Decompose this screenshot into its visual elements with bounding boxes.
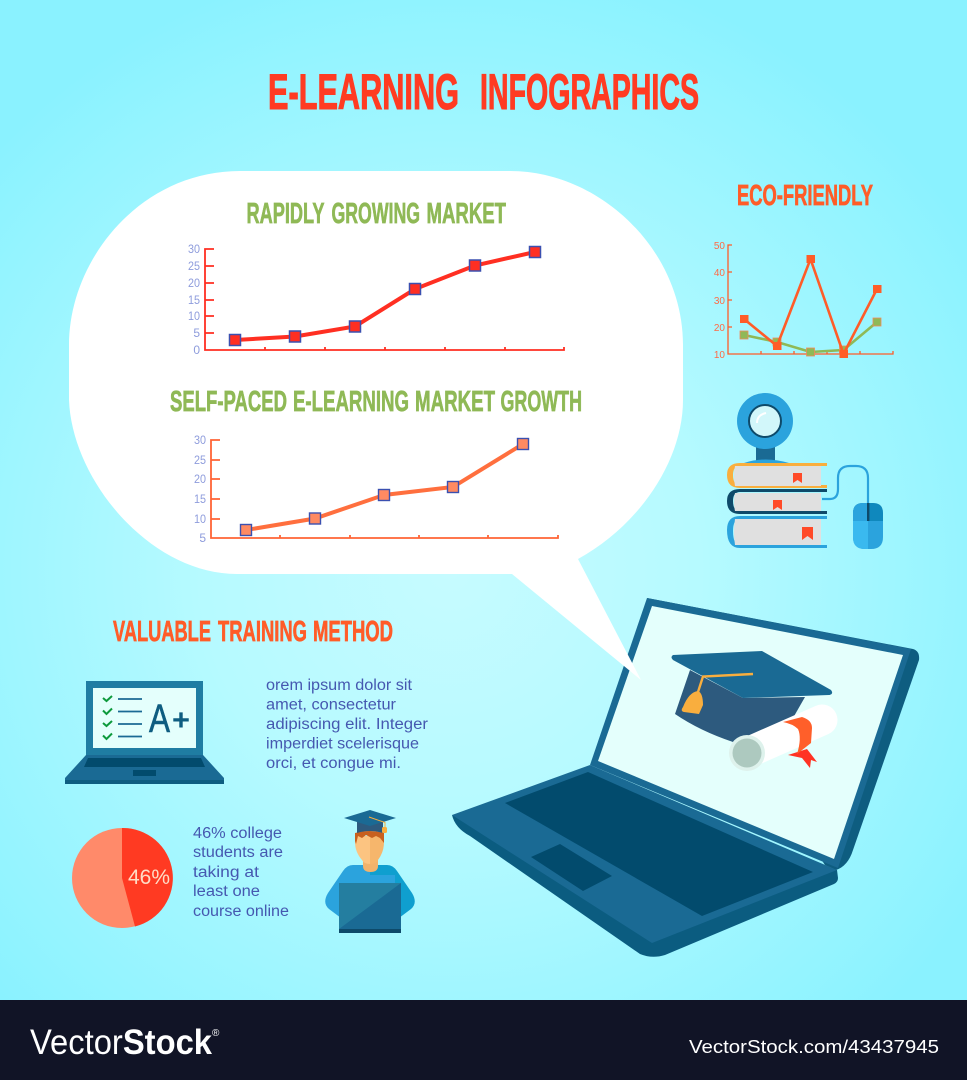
mouse lower body [853, 521, 883, 549]
y axis labels: 50 [714, 241, 725, 252]
webcam lens [749, 405, 781, 437]
heading: valuable training method: METHOD [313, 616, 393, 648]
lid front [590, 598, 911, 868]
y axis labels: 30 [714, 296, 725, 307]
axes [211, 440, 558, 538]
webcam [737, 393, 793, 463]
footer bar [0, 1000, 967, 1080]
bookmark [793, 473, 802, 483]
pages [734, 519, 821, 545]
text block: college students statistic [193, 825, 289, 920]
graduation cap [672, 651, 832, 742]
ribbon tails [788, 749, 817, 768]
text block: college students statistic: 46% college [193, 825, 282, 842]
text block: college students statistic: taking at [193, 864, 260, 881]
heading: self-paced e-learning market growth: E-LEARNING [293, 386, 409, 418]
pie chart: 46 percent [72, 828, 173, 928]
heading: self-paced e-learning market growth [170, 386, 582, 418]
heading: self-paced e-learning market growth: GROWTH [500, 386, 582, 418]
laptop screen [598, 606, 903, 859]
y axis labels: 40 [714, 268, 725, 279]
roll [747, 720, 822, 753]
laptop base top [452, 765, 837, 943]
touchpad [133, 770, 156, 776]
y axis labels: 30 [188, 242, 200, 256]
y axis labels: 10 [188, 309, 200, 323]
heading: eco-friendly: ECO-FRIENDLY [737, 180, 873, 212]
footer logo: VectorStock [30, 1023, 212, 1062]
neck [363, 858, 378, 872]
y axis labels: 25 [188, 259, 200, 273]
left arm and shoulder [325, 865, 370, 918]
y axis labels: 0 [193, 343, 200, 357]
y axis labels: 10 [714, 350, 725, 361]
orange series markers [740, 255, 882, 358]
roll end [729, 735, 765, 771]
heading: self-paced e-learning market growth: SELF-PACED [170, 386, 287, 418]
lens highlight [757, 413, 766, 423]
green series markers [740, 318, 881, 356]
laptop lid side [647, 598, 919, 870]
y axis labels: 20 [188, 276, 200, 290]
checklist lines [118, 699, 142, 736]
heading: rapidly growing market: RAPIDLY [246, 198, 324, 230]
base [65, 755, 224, 784]
heading: rapidly growing market: MARKET [426, 198, 506, 230]
text block: lorem ipsum: imperdiet scelerisque [266, 736, 419, 752]
laptop back [339, 883, 401, 933]
axes [728, 245, 893, 354]
text block: college students statistic: least one [193, 883, 260, 900]
bottom book [727, 516, 827, 548]
icon: small laptop with A+ grade [65, 681, 224, 784]
touchpad [531, 844, 612, 891]
data line [246, 444, 523, 530]
tassel cord [369, 817, 385, 828]
checkmarks [103, 696, 112, 739]
screen [93, 688, 196, 748]
tassel [382, 827, 387, 833]
title: INFOGRAPHICS [480, 64, 699, 120]
hair [355, 831, 384, 844]
axes [205, 249, 564, 350]
heading: valuable training method [113, 616, 393, 648]
grade: A [149, 697, 170, 741]
y axis labels: 15 [194, 492, 206, 506]
keyboard [84, 758, 205, 767]
text block: lorem ipsum: amet, consectetur [266, 696, 396, 714]
mouse upper body [853, 503, 883, 521]
text block: college students statistic: course online [193, 903, 289, 920]
text block: lorem ipsum [266, 677, 428, 772]
webcam ring [737, 393, 793, 449]
face left [355, 836, 370, 864]
pages [734, 493, 821, 511]
line chart: self-paced market growth [194, 433, 558, 545]
webcam neck [756, 444, 775, 461]
screen frame [86, 681, 203, 756]
face right [370, 836, 384, 864]
line chart: eco-friendly [714, 241, 893, 361]
orange series line [744, 259, 877, 354]
text block: lorem ipsum: adipiscing elit. Integer [266, 716, 428, 733]
cap board [672, 651, 832, 698]
pie label: 46% [128, 866, 170, 889]
tassel cord [698, 674, 753, 692]
pages [734, 466, 821, 486]
y axis labels: 15 [188, 293, 200, 307]
tassel [682, 691, 703, 714]
mouse [853, 503, 883, 549]
bookmark [773, 500, 782, 510]
ribbon band [783, 717, 812, 754]
right arm and shoulder [370, 865, 415, 918]
y axis labels: 30 [194, 433, 206, 447]
cover [727, 516, 827, 548]
data markers [240, 438, 528, 536]
cap body [357, 820, 383, 833]
green series line [744, 322, 877, 352]
footer registered mark: ® [212, 1028, 220, 1039]
title: E-LEARNING [268, 64, 459, 120]
heading: rapidly growing market [246, 198, 506, 230]
torso [345, 875, 395, 895]
text block: lorem ipsum: orem ipsum dolor sit [266, 677, 413, 694]
top book [727, 463, 827, 488]
cover [727, 463, 827, 488]
y axis labels: 5 [193, 326, 200, 340]
y axis labels [188, 242, 200, 357]
text block: lorem ipsum: orci, et congue mi. [266, 755, 401, 772]
laptop base side [452, 815, 838, 957]
keyboard [505, 772, 813, 916]
data line [235, 252, 535, 340]
heading: self-paced e-learning market growth: MARKET [415, 386, 495, 418]
y axis labels: 25 [194, 453, 206, 467]
y axis labels: 5 [199, 531, 206, 545]
data markers [230, 246, 540, 346]
heading: rapidly growing market: GROWING [332, 198, 420, 230]
y axis labels: 10 [194, 512, 206, 526]
pie remainder [72, 828, 172, 928]
laptop edge [339, 929, 401, 933]
y axis labels: 20 [194, 472, 206, 486]
y axis labels: 20 [714, 323, 725, 334]
icon: webcam, books and mouse [727, 393, 883, 549]
line chart: rapidly growing market [188, 242, 564, 357]
grade: + [172, 704, 190, 737]
y axis labels [714, 241, 725, 361]
y axis labels [194, 433, 206, 545]
text block: college students statistic: students are [193, 844, 283, 861]
base edge [65, 780, 224, 784]
grade [149, 697, 190, 741]
heading: valuable training method: TRAINING [218, 616, 307, 648]
illustration: large laptop [452, 598, 919, 957]
icon: student with laptop [325, 810, 415, 933]
middle book [727, 489, 827, 514]
webcam base [744, 460, 789, 463]
mouse wheel [867, 503, 869, 521]
pie slice [122, 828, 173, 926]
speech bubble [69, 171, 683, 680]
laptop shade [339, 883, 401, 929]
cap board [344, 810, 396, 826]
footer image id: VectorStock.com/43437945 [689, 1037, 939, 1057]
cap body [675, 670, 805, 742]
heading: valuable training method: VALUABLE [113, 616, 211, 648]
bookmark [802, 527, 813, 540]
diploma scroll [729, 717, 822, 771]
cover [727, 489, 827, 514]
mouse cable [822, 466, 868, 505]
